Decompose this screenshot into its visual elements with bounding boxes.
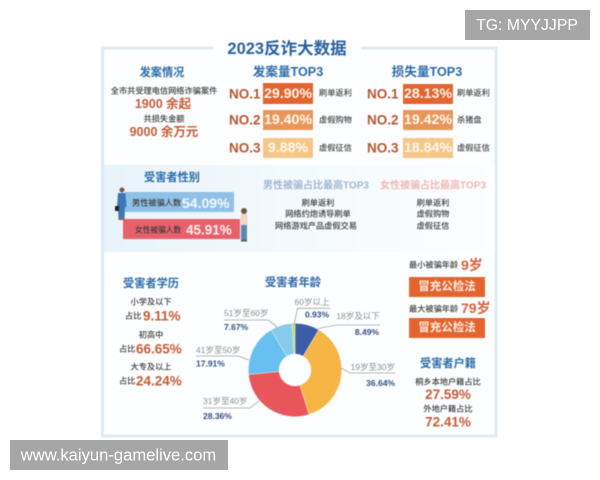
infographic body <box>102 39 496 436</box>
label: 31 to 40: 28.36% <box>203 411 232 421</box>
panel: case count top 3: 虚假征信 <box>319 142 352 152</box>
panel: loss amount top 3: NO.1 <box>367 86 399 102</box>
panel: loss amount top 3: 杀猪盘 <box>457 114 482 124</box>
panel: case count top 3: 9.88% <box>268 140 308 156</box>
label: 31 to 40: 31岁至40岁 <box>203 396 247 406</box>
panel: victim education: 占比 <box>119 376 135 386</box>
watermark: top right <box>465 10 590 40</box>
female bar: 女性被骗人数 <box>135 224 181 234</box>
panel: male top 3: 网络约炮诱导刷单 <box>285 208 351 218</box>
label: 19 to 30: 36.64% <box>366 378 395 388</box>
label: 19 to 30 <box>341 362 395 388</box>
panel: case overview: 1900 余起 <box>135 96 192 111</box>
label: 41 to 50: 41岁至50岁 <box>196 345 240 355</box>
male bar <box>125 192 234 212</box>
panel: loss amount top 3: 18.84% <box>404 140 452 156</box>
label: 41 to 50 <box>196 345 249 368</box>
watermark: bottom left: www.kaiyun-gamelive.com <box>20 446 216 464</box>
label: 31 to 40 <box>203 396 260 421</box>
panel: male top 3: 网络游戏产品虚假交易 <box>275 220 357 230</box>
panel: youngest and oldest victims: 79岁 <box>461 300 491 316</box>
panel: female top 3 <box>380 178 486 230</box>
panel: victim education: 初高中 <box>139 330 163 340</box>
panel: victim education: 24.24% <box>136 374 182 388</box>
label: 51 to 60: 51岁至60岁 <box>224 308 268 318</box>
panel: victim education: 大专及以上 <box>131 362 171 372</box>
panel: victim household registration: 受害者户籍 <box>420 356 476 370</box>
panel: youngest and oldest victims: 冒充公检法 <box>418 279 476 293</box>
watermark: top right: TG: MYYJJPP <box>476 17 578 34</box>
panel: victim household registration: 桐乡本地户籍占比 <box>415 376 481 386</box>
panel: loss amount top 3: NO.2 <box>367 112 399 128</box>
panel: victim education: 66.65% <box>136 342 182 356</box>
panel: case overview: 全市共受理电信网络诈骗案件 <box>111 86 217 96</box>
donut chart <box>248 323 342 417</box>
panel: case count top 3: 发案量TOP3 <box>253 64 323 79</box>
panel: loss amount top 3: 虚假征信 <box>457 142 490 152</box>
panel: female top 3: 刷单返利 <box>417 198 449 208</box>
panel: victim household registration <box>415 356 481 430</box>
panel: victim education: 受害者学历 <box>123 276 179 290</box>
panel: case count top 3: 29.90% <box>264 86 312 102</box>
panel: victim age <box>196 275 395 421</box>
panel: loss amount top 3: 28.13% <box>404 86 452 102</box>
panel: female top 3: 虚假购物 <box>417 208 449 218</box>
panel: case overview <box>111 65 217 139</box>
panel: case count top 3 <box>229 64 352 158</box>
panel: victim household registration: 外地户籍占比 <box>423 404 473 414</box>
male bar: 54.09% <box>182 195 230 211</box>
panel: victim education: 小学及以下 <box>131 296 171 306</box>
panel: female top 3: 女性被骗占比最高TOP3 <box>380 178 486 192</box>
panel: female top 3: 虚假征信 <box>417 220 449 230</box>
icon: woman <box>240 208 248 242</box>
panel: victim household registration: 72.41% <box>425 414 471 430</box>
panel: case overview: 发案情况 <box>140 65 184 79</box>
panel: loss amount top 3: 19.42% <box>404 112 452 128</box>
panel: youngest and oldest victims: 最大被骗年龄 <box>409 304 459 314</box>
panel: youngest and oldest victims: 最小被骗年龄 <box>409 260 459 270</box>
label: 60 and over: 60岁以上 <box>295 297 330 307</box>
panel: victim education <box>119 276 182 388</box>
label: 18 and under: 8.49% <box>355 327 379 337</box>
panel: youngest and oldest victims <box>409 257 491 338</box>
panel: case count top 3: 刷单返利 <box>319 88 352 98</box>
label: 60 and over: 0.93% <box>305 310 329 320</box>
icon: man with briefcase <box>115 188 126 220</box>
label: 19 to 30: 19岁至30岁 <box>351 362 395 372</box>
panel: youngest and oldest victims: 9岁 <box>461 257 483 273</box>
panel: case overview: 共损失金额 <box>144 114 184 124</box>
label: 41 to 50: 17.91% <box>196 358 225 368</box>
panel: gender band background <box>104 165 495 252</box>
panel: case count top 3: 19.40% <box>264 112 312 128</box>
male bar: 男性被骗人数 <box>132 198 181 208</box>
panel: victim education: 9.11% <box>143 308 181 324</box>
label: 51 to 60 <box>224 308 277 332</box>
panel: loss amount top 3 <box>367 64 490 158</box>
panel: victim gender <box>115 170 248 242</box>
panel: loss amount top 3: 刷单返利 <box>457 88 490 98</box>
label: 18 and under: 18岁及以下 <box>336 311 380 321</box>
panel: male top 3: 刷单返利 <box>302 198 334 208</box>
panel: victim education: 占比 <box>119 344 135 354</box>
panel: loss amount top 3: 损失量TOP3 <box>392 64 462 79</box>
panel: case count top 3: NO.2 <box>229 112 261 128</box>
panel: victim household registration: 27.59% <box>425 387 471 402</box>
panel: case count top 3: NO.3 <box>229 140 261 156</box>
panel: male top 3 <box>263 178 369 230</box>
label: 18 and under <box>318 311 380 337</box>
label: 60 and over <box>294 297 330 325</box>
panel: victim education: 占比 <box>125 310 141 320</box>
female bar <box>123 219 240 239</box>
panel: victim age: 受害者年龄 <box>265 275 322 289</box>
panel: case count top 3: NO.1 <box>229 86 261 102</box>
watermark: bottom left <box>10 440 228 470</box>
panel: main frame <box>102 48 496 436</box>
panel: male top 3: 男性被骗占比最高TOP3 <box>263 178 369 192</box>
panel: loss amount top 3: NO.3 <box>367 140 399 156</box>
panel: case overview: 9000 余万元 <box>130 124 199 139</box>
female bar: 45.91% <box>186 222 232 238</box>
label: 51 to 60: 7.67% <box>224 322 249 332</box>
panel: case count top 3: 虚假购物 <box>319 114 352 124</box>
title: 2023反诈大数据 <box>227 39 347 58</box>
panel: victim gender: 受害者性别 <box>144 170 200 184</box>
panel: youngest and oldest victims: 冒充公检法 <box>418 320 476 334</box>
